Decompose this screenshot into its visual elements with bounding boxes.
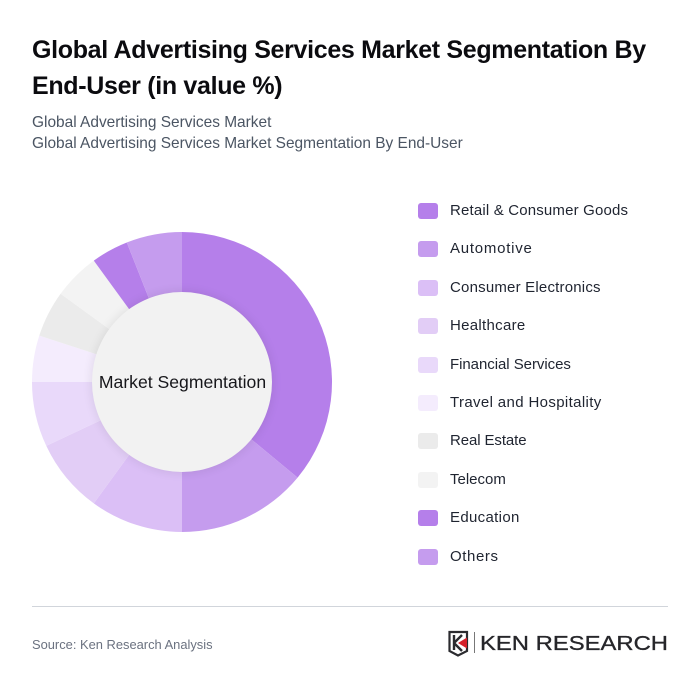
legend item: Financial Services: Financial Services	[450, 356, 571, 373]
legend	[418, 202, 628, 565]
logo: Ken Research: KEN RESEARCH	[480, 633, 668, 655]
subtitle: Global Advertising Services Market	[32, 114, 271, 131]
subtitle	[32, 114, 463, 152]
icon: K shield	[450, 632, 467, 656]
donut chart	[32, 232, 332, 532]
title: Global Advertising Services Market Segmentation By	[32, 36, 646, 64]
legend item: Others: Others	[450, 548, 499, 565]
legend item: Others	[418, 548, 499, 565]
legend item: Travel and Hospitality: Travel and Hospitality	[450, 394, 602, 411]
legend item: Real Estate: Real Estate	[450, 432, 526, 449]
subtitle: Global Advertising Services Market Segmentation By End-User	[32, 135, 463, 152]
legend item: Education: Education	[450, 509, 520, 526]
title	[32, 36, 646, 100]
legend item: Telecom: Telecom	[450, 471, 506, 488]
legend item: Education	[418, 509, 520, 526]
logo: Ken Research	[448, 630, 668, 657]
legend item: Retail & Consumer Goods: Retail & Consumer Goods	[450, 202, 628, 219]
title: End-User (in value %)	[32, 72, 282, 100]
donut chart: Market Segmentation	[99, 372, 266, 392]
legend item: Telecom	[418, 471, 506, 488]
legend item: Consumer Electronics: Consumer Electronics	[450, 279, 601, 296]
legend item: Healthcare: Healthcare	[450, 317, 526, 334]
legend item: Automotive: Automotive	[450, 240, 533, 257]
source note: Source: Ken Research Analysis	[32, 637, 213, 652]
